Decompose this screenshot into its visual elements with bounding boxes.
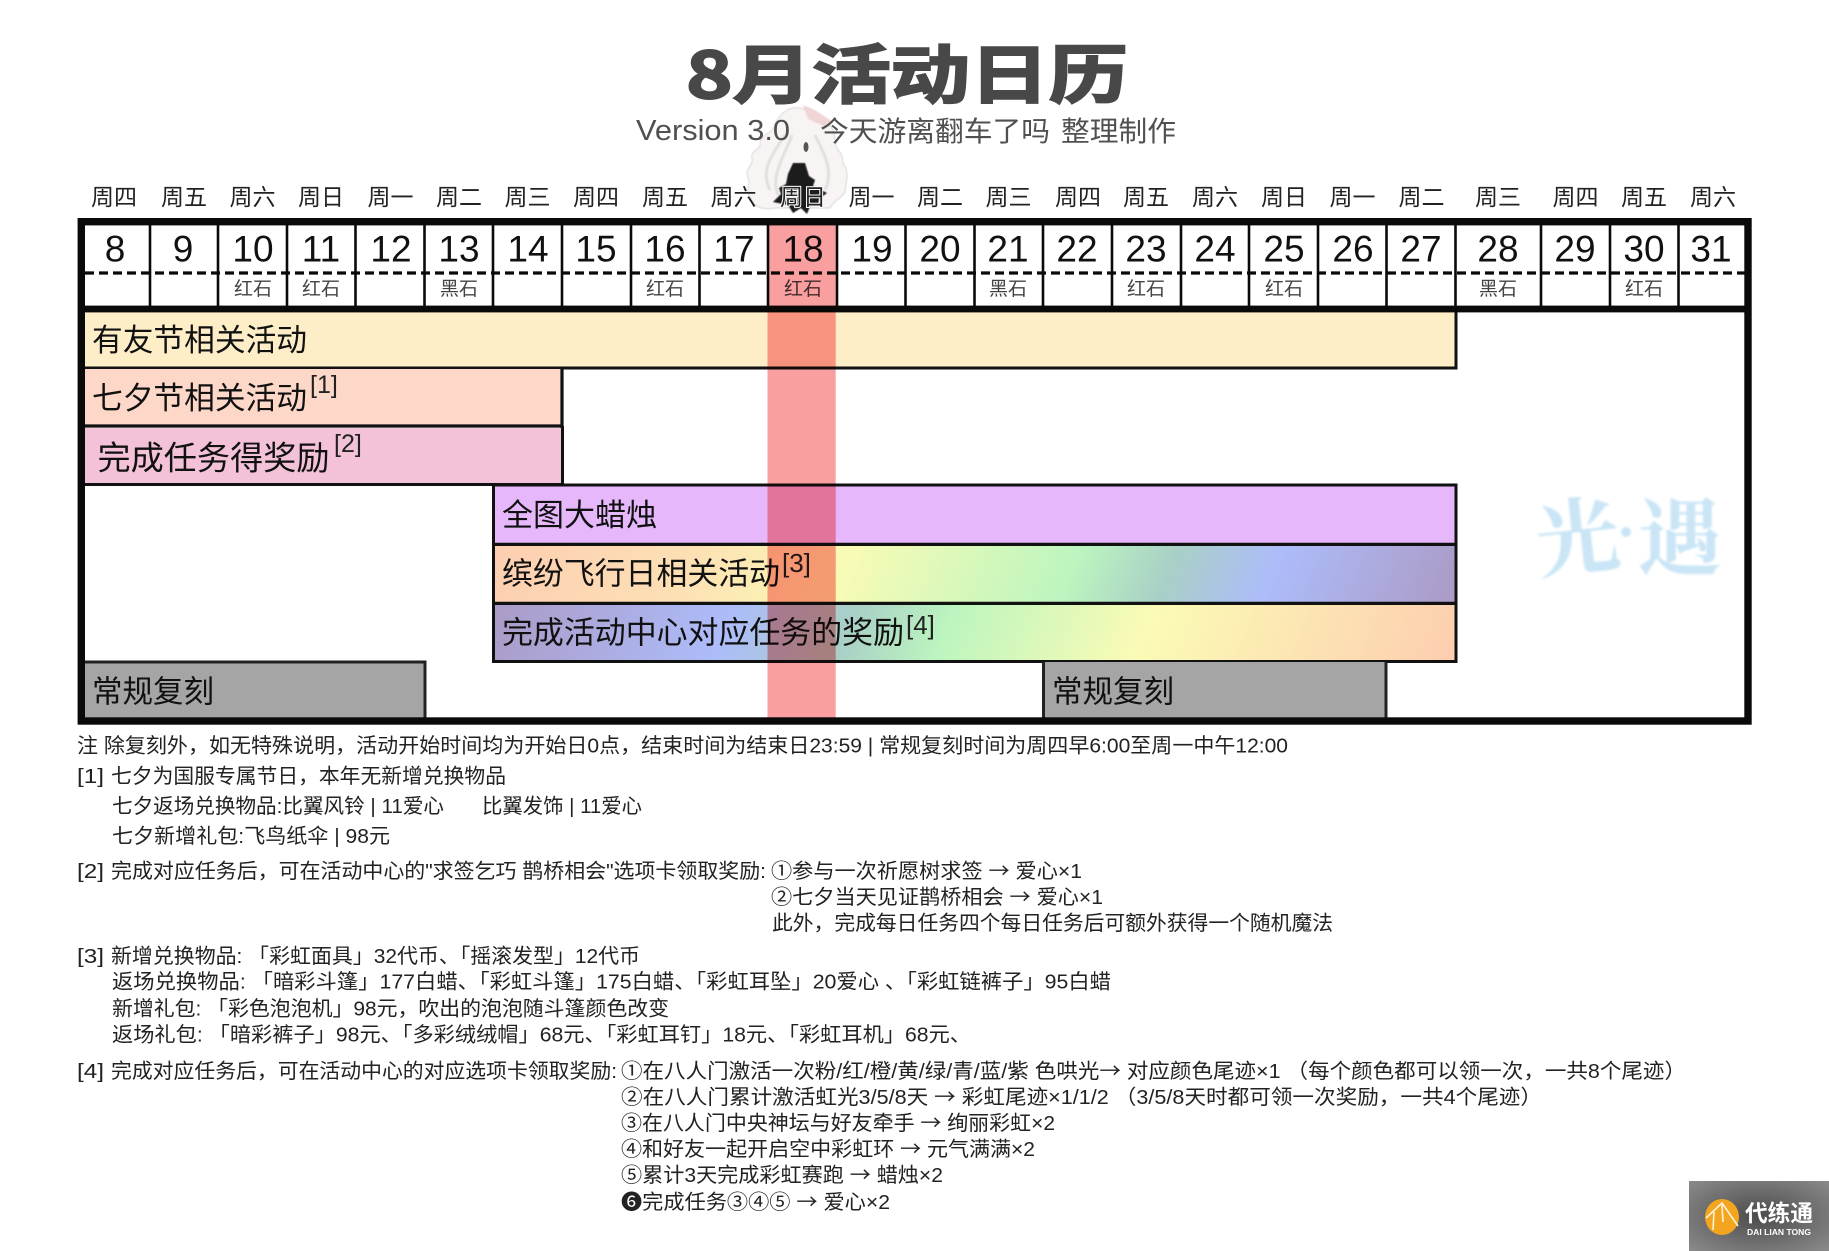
weekday labels: 周六 xyxy=(230,184,276,210)
watermark badge: 代练通: DAI LIAN TONG xyxy=(1747,1227,1811,1237)
currency tags: red and black stones: 红石 xyxy=(646,278,684,300)
weekday labels: 周三 xyxy=(986,184,1032,210)
today highlight stripe: 18th xyxy=(768,225,836,718)
subtitle: 整理制作 xyxy=(1061,116,1176,147)
currency tags: red and black stones: 红石 xyxy=(1265,278,1303,300)
bar: 常规复刻 second xyxy=(1043,662,1386,718)
bar: 完成活动中心对应任务的奖励: [4] xyxy=(906,610,935,640)
currency tags: red and black stones: 黑石 xyxy=(989,279,1027,300)
weekday labels: 周五 xyxy=(642,184,688,210)
date numbers: 20 xyxy=(919,228,961,270)
watermark: 光遇 logo: 光 xyxy=(1529,468,1625,597)
date numbers: 30 xyxy=(1623,228,1665,270)
note 1: [1] xyxy=(77,765,104,788)
date numbers: 23 xyxy=(1125,228,1167,270)
note 3 xyxy=(77,945,1111,1046)
bar: 缤纷飞行日相关活动: 缤纷飞行日相关活动 xyxy=(502,556,780,592)
weekday labels: 周一 xyxy=(848,184,894,210)
weekday labels: 周一 xyxy=(368,184,414,210)
date numbers: 10 xyxy=(232,228,274,270)
bar: 完成任务得奖励 xyxy=(85,426,564,486)
date numbers: 16 xyxy=(644,228,686,270)
note: general: 注 除复刻外，如无特殊说明，活动开始时间均为开始日0点，结束时间为结束日23:59 | 常规复刻时间为周四早6:00至周一中午12:00 xyxy=(77,734,1288,758)
note 3: [3] xyxy=(77,945,104,968)
date numbers: 28 xyxy=(1477,228,1519,270)
note 4: 完成对应任务后，可在活动中心的对应选项卡领取奖励: xyxy=(111,1060,617,1083)
note 4: [4] xyxy=(77,1060,104,1083)
note 1: 七夕为国服专属节日，本年无新增兑换物品 xyxy=(111,765,506,788)
note 2 xyxy=(77,854,1333,935)
bar: 七夕节相关活动 xyxy=(85,367,564,428)
note 4: ❻完成任务③④⑤ → 爱心×2 xyxy=(621,1185,890,1215)
weekday labels: 周六 xyxy=(1690,184,1736,210)
weekday labels: 周五 xyxy=(1621,184,1667,210)
subtitle: Version 3.0 xyxy=(636,115,790,147)
currency tags: red and black stones: 红石 xyxy=(1625,278,1663,300)
bar: 全图大蜡烛: 全图大蜡烛 xyxy=(502,498,657,533)
date numbers: 29 xyxy=(1554,228,1596,270)
bar: 七夕节相关活动: 七夕节相关活动 xyxy=(92,381,307,416)
date numbers: 17 xyxy=(713,228,755,270)
date numbers: 8 xyxy=(105,228,125,270)
icon: white-haired character xyxy=(747,105,847,214)
notes text block xyxy=(77,734,1686,1215)
date numbers: 11 xyxy=(302,228,340,270)
bar: 有友节相关活动 xyxy=(85,312,1458,370)
watermark badge: 代练通: 代练通 xyxy=(1745,1200,1813,1226)
bar: 常规复刻 first xyxy=(85,660,426,718)
weekday labels: 周日 xyxy=(780,184,826,210)
bar: 缤纷飞行日相关活动 xyxy=(493,546,1458,604)
date numbers: 19 xyxy=(851,228,893,270)
currency tags: red and black stones: 红石 xyxy=(302,278,340,300)
bar: 完成任务得奖励: 完成任务得奖励 xyxy=(98,440,330,476)
note 4: ⑤累计3天完成彩虹赛跑 → 蜡烛×2 xyxy=(621,1158,943,1188)
date numbers: 21 xyxy=(987,228,1029,270)
subtitle: 今天游离翻车了吗 xyxy=(820,116,1050,147)
weekday labels: 周五 xyxy=(161,184,207,210)
weekday labels: 周二 xyxy=(1398,184,1444,210)
note 4: ③在八人门中央神坛与好友牵手 → 绚丽彩虹×2 xyxy=(621,1106,1055,1136)
note 4: ②在八人门累计激活虹光3/5/8天 → 彩虹尾迹×1/1/2 （3/5/8天时都可领一次奖励，一共4个尾迹） xyxy=(621,1080,1542,1110)
bar: 全图大蜡烛 xyxy=(493,485,1458,544)
date numbers xyxy=(105,228,1732,270)
bar: 常规复刻 second: 常规复刻 xyxy=(1052,674,1174,710)
weekday labels: 周四 xyxy=(1552,184,1598,210)
date numbers: 13 xyxy=(438,228,480,270)
bar: 完成活动中心对应任务的奖励: 完成活动中心对应任务的奖励 xyxy=(502,616,904,650)
title: 8月活动日历 xyxy=(686,25,1128,117)
note 3: 返场兑换物品: 「暗彩斗篷」177白蜡、「彩虹斗篷」175白蜡、「彩虹耳坠」20爱心 、「彩虹链裤子」95白蜡 xyxy=(112,970,1111,994)
weekday labels: 周日 xyxy=(1261,184,1307,210)
note 1: 比翼发饰 | 11爱心 xyxy=(482,795,642,818)
note 3: 新增兑换物品: 「彩虹面具」32代币、「摇滚发型」12代币 xyxy=(111,945,640,968)
note 1: 七夕新增礼包:飞鸟纸伞 | 98元 xyxy=(112,825,390,848)
bar: 完成任务得奖励: [2] xyxy=(334,430,362,458)
weekday labels: 周二 xyxy=(917,184,963,210)
note 4 xyxy=(77,1054,1686,1215)
currency tags: red and black stones: 红石 xyxy=(234,278,272,300)
bar: 有友节相关活动: 有友节相关活动 xyxy=(92,323,307,358)
weekday labels: 周日 xyxy=(298,184,344,210)
date numbers: 25 xyxy=(1263,228,1305,270)
note 2: ②七夕当天见证鹊桥相会 → 爱心×1 xyxy=(771,880,1103,910)
date numbers: 24 xyxy=(1194,228,1236,270)
weekday labels: 周三 xyxy=(504,184,550,210)
watermark badge: 代练通 xyxy=(1689,1181,1829,1251)
date numbers: 14 xyxy=(507,228,549,270)
date numbers: 9 xyxy=(173,228,193,270)
weekday labels xyxy=(91,184,1736,210)
currency tags: red and black stones xyxy=(234,278,1663,300)
date numbers: 18 xyxy=(782,228,824,270)
date numbers: 12 xyxy=(370,228,412,270)
note 2: [2] xyxy=(77,860,104,883)
bar: 缤纷飞行日相关活动: [3] xyxy=(782,548,811,578)
note 3: 新增礼包: 「彩色泡泡机」98元，吹出的泡泡随斗篷颜色改变 xyxy=(112,998,669,1020)
subtitle xyxy=(636,115,1176,147)
weekday labels: 周一 xyxy=(1330,184,1376,210)
weekday labels: 周四 xyxy=(91,184,137,210)
date numbers: 31 xyxy=(1690,228,1732,270)
currency tags: red and black stones: 黑石 xyxy=(1479,279,1517,300)
note 1 xyxy=(77,765,642,848)
note 1: 七夕返场兑换物品:比翼风铃 | 11爱心 xyxy=(112,795,444,818)
weekday labels: 周二 xyxy=(436,184,482,210)
date numbers: 27 xyxy=(1400,228,1442,270)
date numbers: 15 xyxy=(575,228,617,270)
bar: 完成活动中心对应任务的奖励 xyxy=(493,484,1458,663)
currency tags: red and black stones: 红石 xyxy=(1127,278,1165,300)
note 3: 返场礼包: 「暗彩裤子」98元、「多彩绒绒帽」68元、「彩虹耳钉」18元、「彩虹耳机」68元、 xyxy=(112,1024,971,1046)
currency tags: red and black stones: 红石 xyxy=(784,278,822,300)
note 4: ④和好友一起开启空中彩虹环 → 元气满满×2 xyxy=(621,1132,1035,1162)
watermark: 光遇 logo: 遇 xyxy=(1638,472,1722,593)
weekday labels: 周四 xyxy=(1055,184,1101,210)
icon: orange badge xyxy=(1705,1199,1739,1235)
weekday labels: 周五 xyxy=(1123,184,1169,210)
bar: 常规复刻 first: 常规复刻 xyxy=(92,674,214,710)
watermark: 光遇 logo xyxy=(1529,468,1722,597)
weekday labels: 周三 xyxy=(1475,184,1521,210)
currency tags: red and black stones: 黑石 xyxy=(440,279,478,300)
calendar grid frame xyxy=(81,222,1748,721)
note 2: ①参与一次祈愿树求签 → 爱心×1 xyxy=(771,854,1082,884)
weekday labels: 周四 xyxy=(573,184,619,210)
note 2: 此外，完成每日任务四个每日任务后可额外获得一个随机魔法 xyxy=(772,912,1333,935)
bar: 七夕节相关活动: [1] xyxy=(310,371,338,399)
date numbers: 26 xyxy=(1332,228,1374,270)
note 2: 完成对应任务后，可在活动中心的"求签乞巧 鹊桥相会"选项卡领取奖励: xyxy=(111,860,766,883)
note 4: ①在八人门激活一次粉/红/橙/黄/绿/青/蓝/紫 色哄光 → 对应颜色尾迹×1 （每个颜色都可以领一次，一共8个尾迹） xyxy=(621,1054,1686,1084)
weekday labels: 周六 xyxy=(1192,184,1238,210)
date numbers: 22 xyxy=(1056,228,1098,270)
weekday labels: 周六 xyxy=(710,184,756,210)
